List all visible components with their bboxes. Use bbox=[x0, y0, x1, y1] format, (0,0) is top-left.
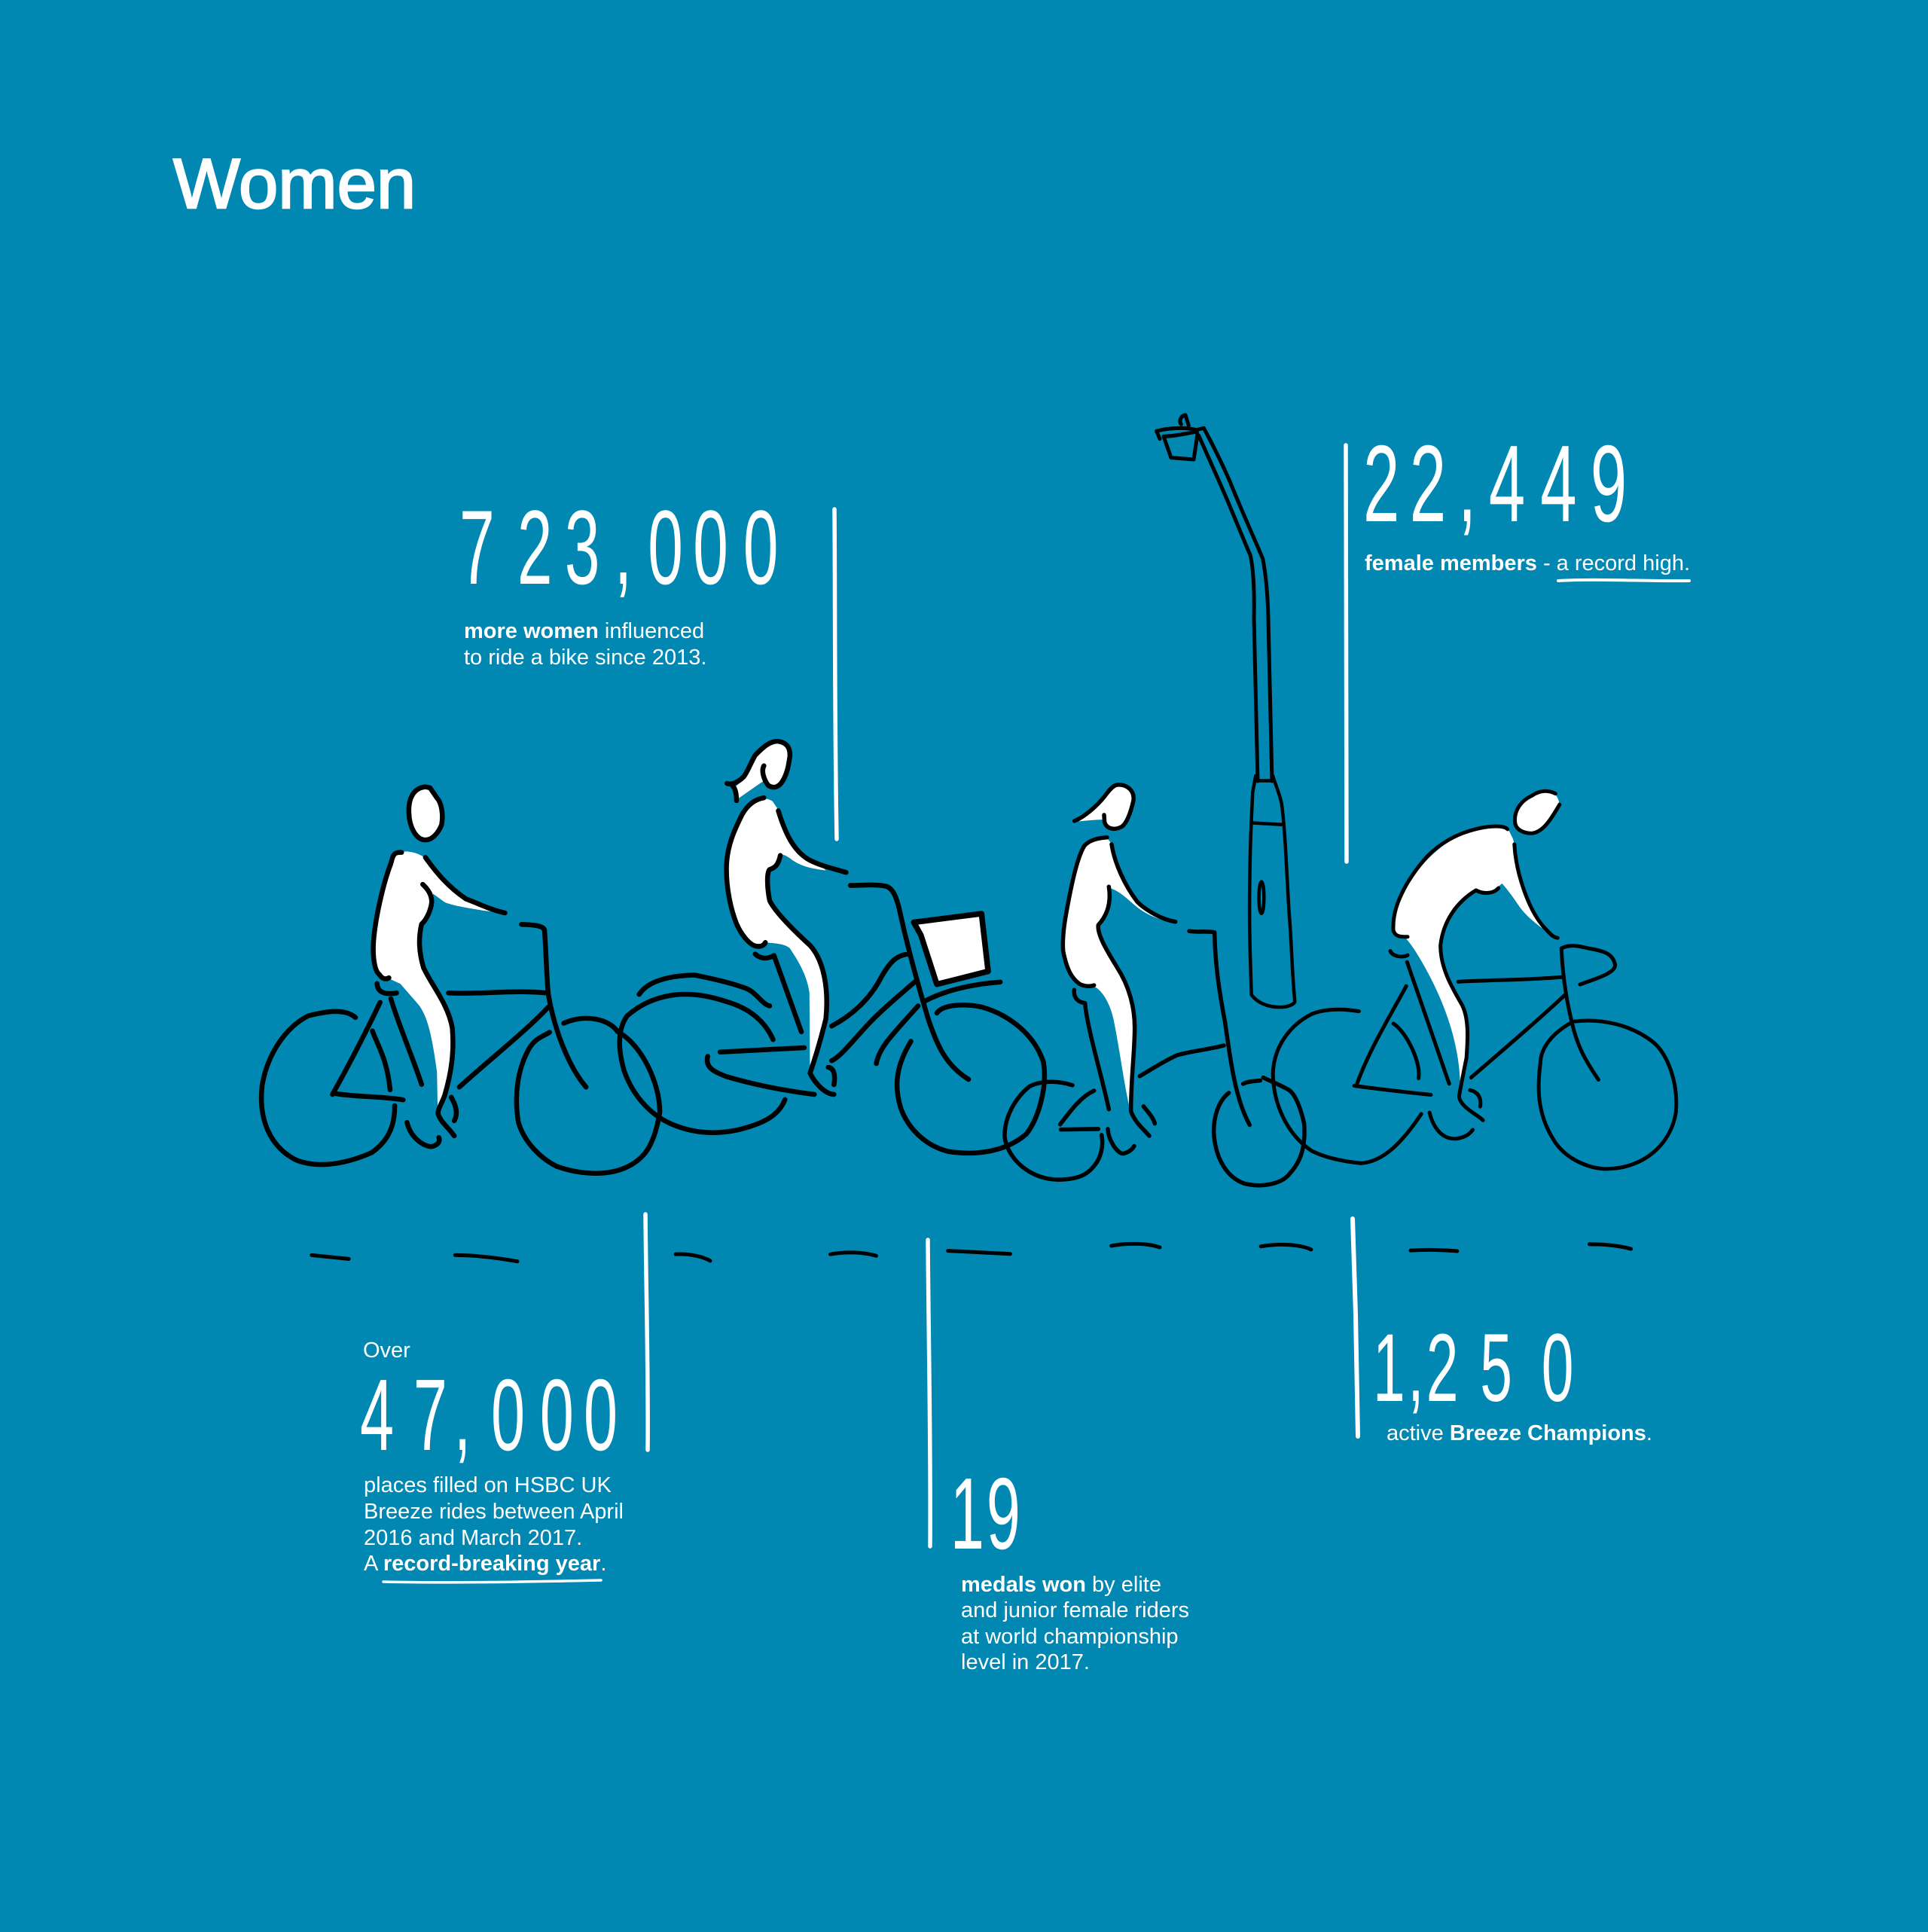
rider 2: cyclist with basket bbox=[620, 740, 1045, 1153]
body and bicycle outlines bbox=[1273, 791, 1676, 1169]
title: Women bbox=[173, 144, 416, 223]
description: more women influenced bbox=[464, 619, 704, 643]
callout: 47,000: Breeze rides between April bbox=[364, 1500, 624, 1524]
description: medals won by elite bbox=[961, 1573, 1161, 1597]
basket bbox=[914, 914, 988, 984]
description: active Breeze Champions. bbox=[1387, 1421, 1652, 1445]
vertical pointer line bbox=[1353, 1219, 1358, 1436]
lamp post bbox=[1157, 415, 1295, 1007]
head bbox=[1515, 791, 1559, 832]
lamp base bbox=[1249, 776, 1295, 1007]
body fill bbox=[726, 798, 827, 1072]
vertical pointer line bbox=[928, 1240, 930, 1546]
body and bicycle outlines bbox=[261, 853, 660, 1174]
callout: 19: and junior female riders bbox=[961, 1598, 1189, 1622]
callout: 47,000 bbox=[360, 1214, 648, 1583]
number: 22,449 bbox=[1363, 423, 1627, 545]
head and hair bbox=[1075, 785, 1133, 829]
number: 47,000 bbox=[360, 1358, 618, 1472]
number: 19 bbox=[950, 1457, 1020, 1570]
callout: 47,000: 2016 and March 2017. bbox=[364, 1526, 582, 1550]
number: 723,000 bbox=[459, 489, 779, 606]
body fill bbox=[1063, 838, 1176, 1107]
callout: 19 bbox=[928, 1240, 1189, 1674]
callout: 19: level in 2017. bbox=[961, 1650, 1090, 1674]
callout: 19: at world championship bbox=[961, 1625, 1179, 1649]
vertical pointer line bbox=[1346, 445, 1347, 862]
rider 3: cyclist beside lamp post bbox=[1005, 785, 1304, 1186]
lamp head and arm bbox=[1157, 415, 1272, 781]
body fill bbox=[1394, 826, 1555, 1085]
callout: 723,000 bbox=[459, 489, 837, 839]
body and bicycle outlines bbox=[1005, 785, 1304, 1186]
road centre dashes bbox=[312, 1244, 1631, 1262]
number: 1,250 bbox=[1373, 1314, 1574, 1422]
description: places filled on HSBC UK bbox=[364, 1473, 612, 1497]
callout: 723,000: to ride a bike since 2013. bbox=[464, 646, 706, 670]
vertical pointer line bbox=[645, 1214, 648, 1450]
underline bbox=[1558, 580, 1689, 581]
vertical pointer line bbox=[834, 509, 837, 839]
head and hair bbox=[735, 740, 790, 798]
lead-in: Over bbox=[363, 1338, 410, 1363]
rider 4: cyclist leaning forward bbox=[1273, 791, 1676, 1169]
callout: 1,250 bbox=[1353, 1219, 1652, 1445]
description: female members - a record high. bbox=[1365, 551, 1690, 575]
underline bbox=[383, 1580, 601, 1583]
callout: 22,449 bbox=[1346, 423, 1690, 862]
body fill bbox=[374, 852, 504, 1113]
body and bicycle outlines bbox=[620, 741, 1045, 1153]
head bbox=[409, 787, 442, 840]
rider 1: cyclist with bicycle bbox=[261, 787, 660, 1174]
callout: 47,000: A record-breaking year. bbox=[364, 1552, 606, 1576]
